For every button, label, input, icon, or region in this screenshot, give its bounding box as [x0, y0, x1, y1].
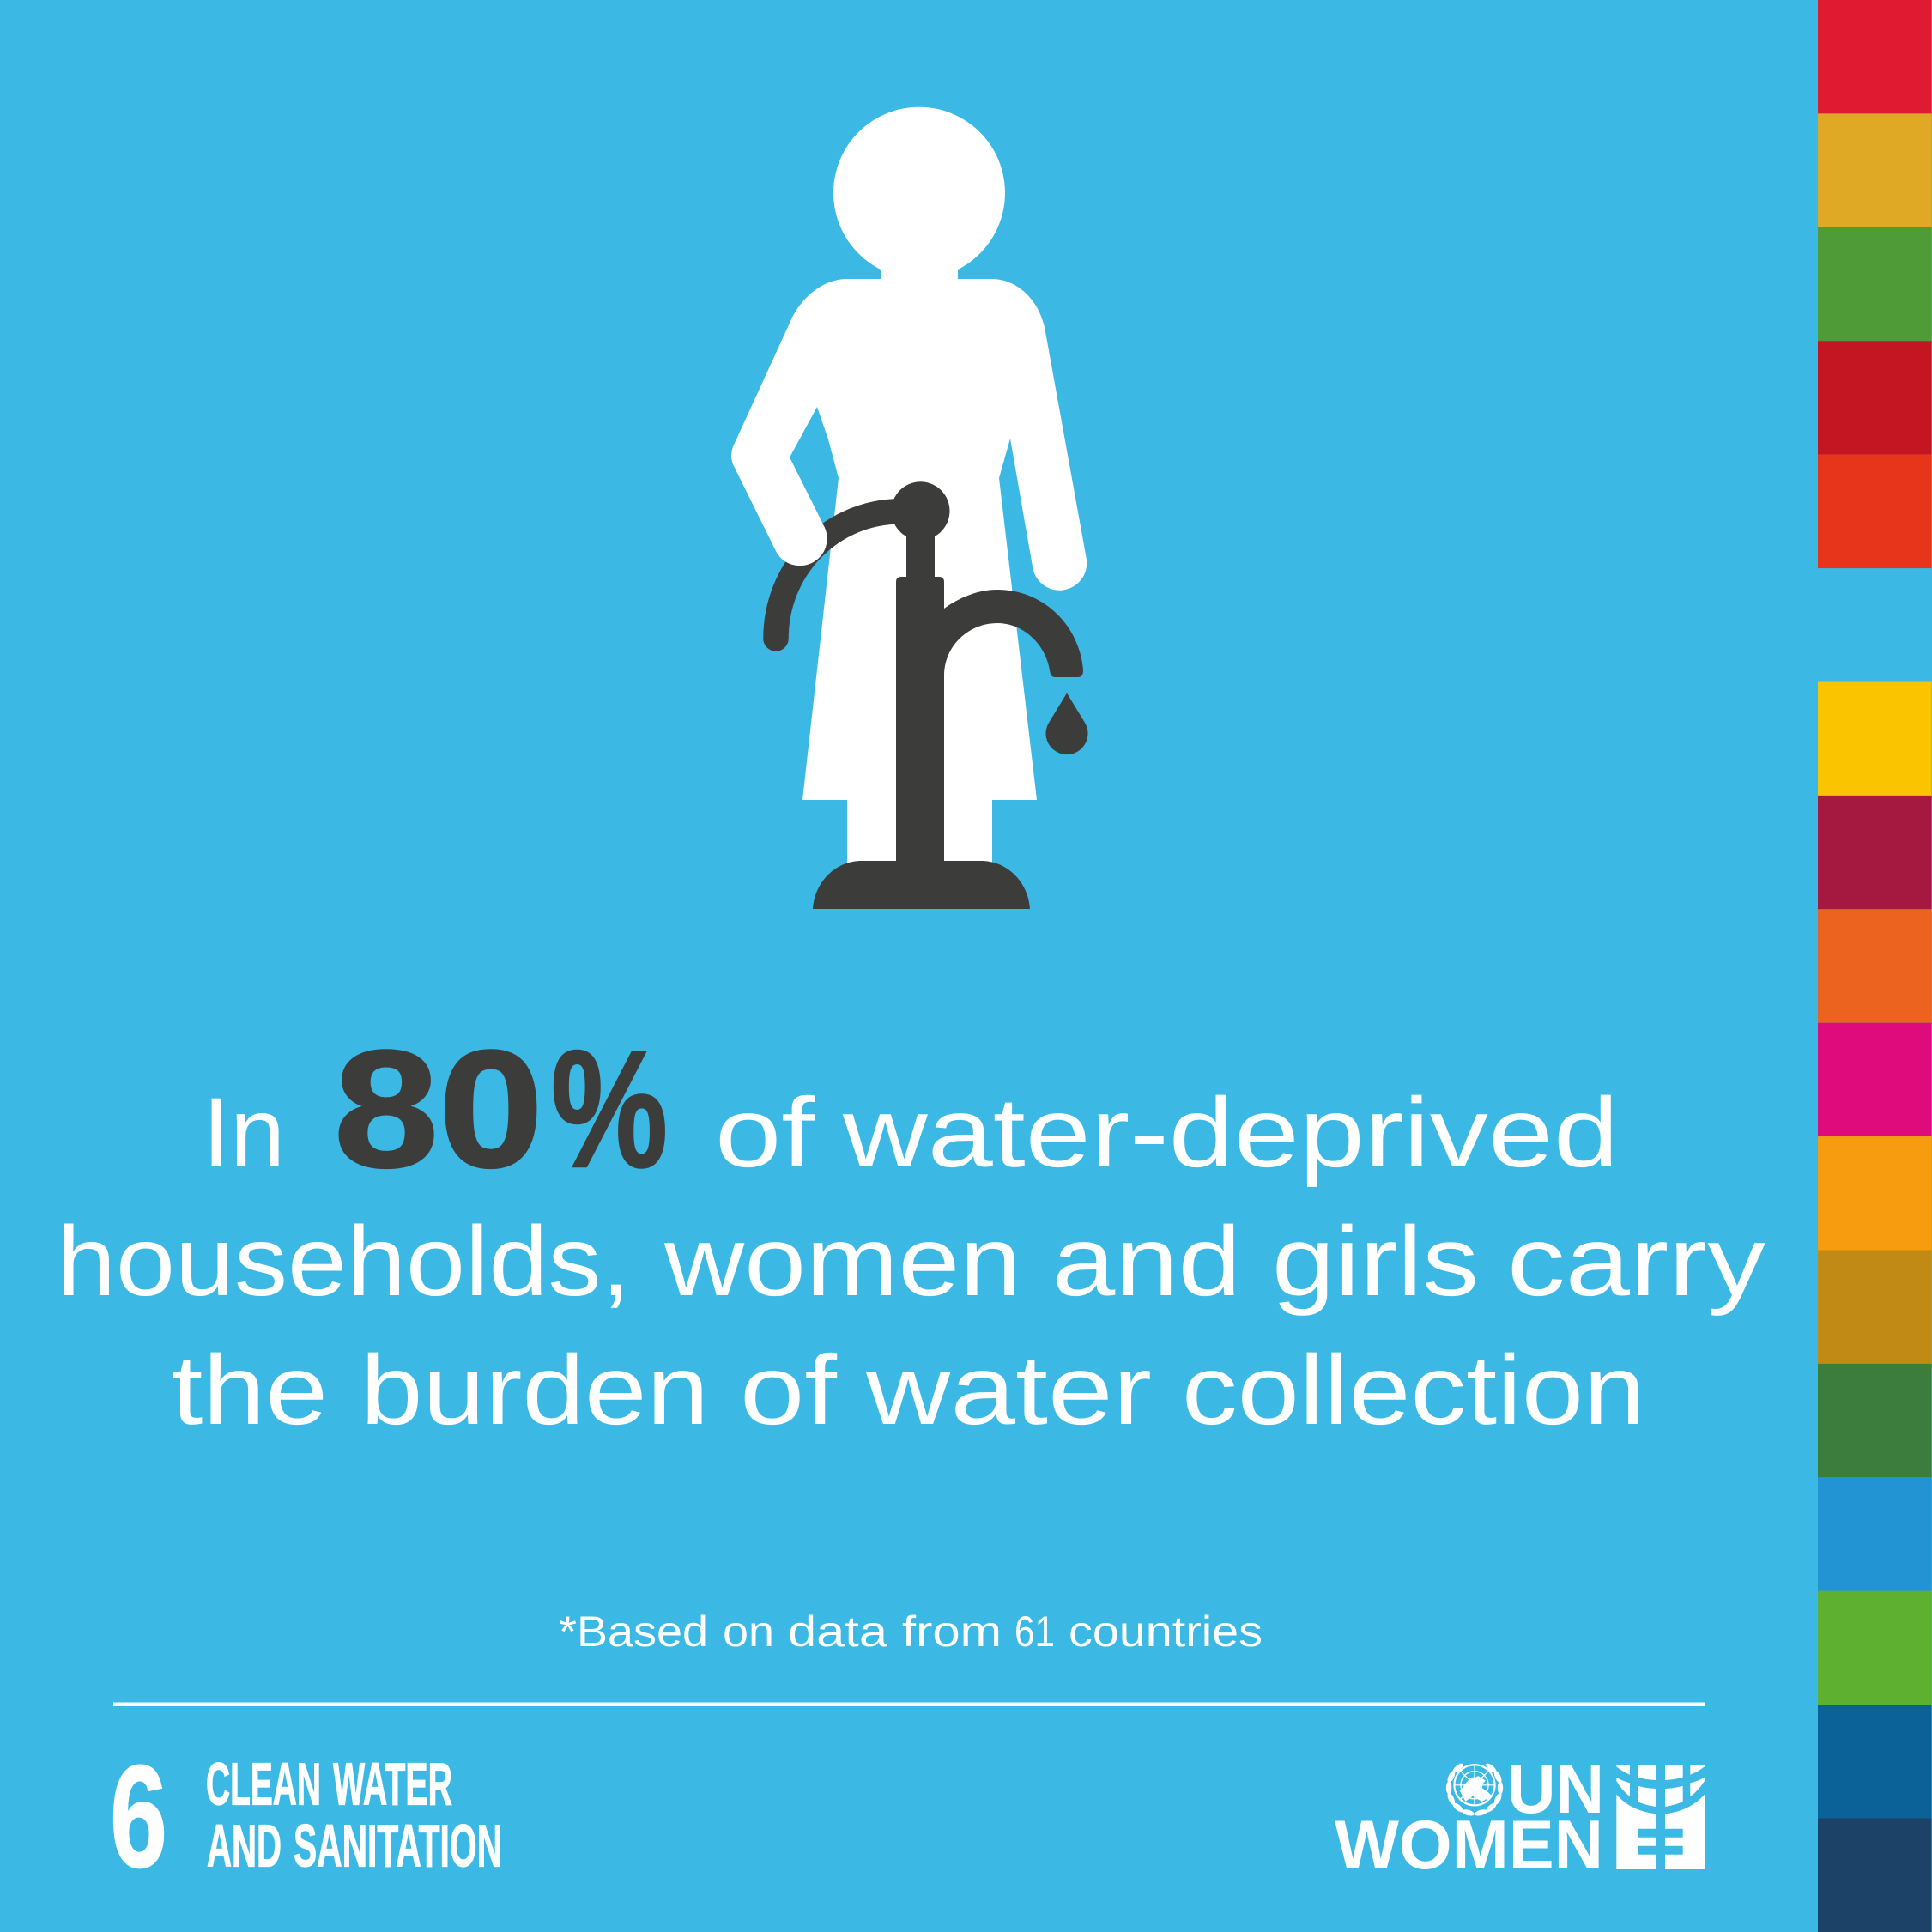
headline line 3: the — [172, 1335, 328, 1445]
icon: hand gripping the pump handle — [748, 457, 827, 566]
headline line 1 — [203, 1016, 1619, 1202]
SDG 6 label — [110, 1735, 502, 1899]
headline line 3: burden — [360, 1335, 709, 1445]
footnote: 61 — [1014, 1608, 1055, 1656]
footnote: data — [788, 1608, 887, 1656]
icon: woman figure — [731, 107, 1087, 867]
headline line 3: water — [865, 1335, 1152, 1445]
logo wordmark — [1335, 1751, 1604, 1884]
headline line 2: carry — [1507, 1207, 1766, 1317]
headline line 2: households, — [57, 1207, 631, 1317]
logo: globe and E symbol — [1616, 1765, 1705, 1869]
icon: water drop — [1045, 693, 1088, 754]
footnote: *Based — [559, 1608, 708, 1656]
footnote: from — [902, 1608, 1002, 1656]
headline line 1: of — [715, 1078, 815, 1188]
headline line 3: of — [740, 1335, 838, 1445]
headline line 2: and — [1052, 1207, 1241, 1317]
headline line 2 — [57, 1207, 1766, 1317]
headline — [57, 1016, 1766, 1445]
statistic: 80%: 80 — [334, 1016, 543, 1202]
goal name: CLEAN — [206, 1751, 321, 1818]
icon: woman using a water pump — [731, 107, 1088, 909]
logo wordmark: UN — [1507, 1751, 1604, 1828]
SDG colour strip — [1818, 0, 1931, 1932]
headline line 1: In — [203, 1078, 285, 1188]
goal name — [206, 1751, 502, 1880]
headline line 2: women — [663, 1207, 1021, 1317]
footnote: countries — [1069, 1608, 1263, 1656]
footnote — [559, 1608, 1263, 1656]
goal name: AND — [207, 1813, 282, 1880]
goal number: 6 — [110, 1735, 167, 1899]
headline line 3 — [172, 1335, 1645, 1445]
icon: water pump — [776, 481, 1083, 909]
footnote: on — [723, 1608, 774, 1656]
headline line 2: girls — [1272, 1207, 1479, 1317]
goal name: WATER — [333, 1751, 452, 1818]
headline line 3: collection — [1182, 1335, 1645, 1445]
logo wordmark: WOMEN — [1335, 1807, 1603, 1884]
goal name: SANITATION — [294, 1813, 502, 1880]
UN Women logo — [1335, 1751, 1705, 1884]
logo: UN emblem — [1446, 1762, 1503, 1817]
statistic: 80%: % — [551, 1016, 668, 1202]
headline line 1: water-deprived — [842, 1078, 1619, 1188]
